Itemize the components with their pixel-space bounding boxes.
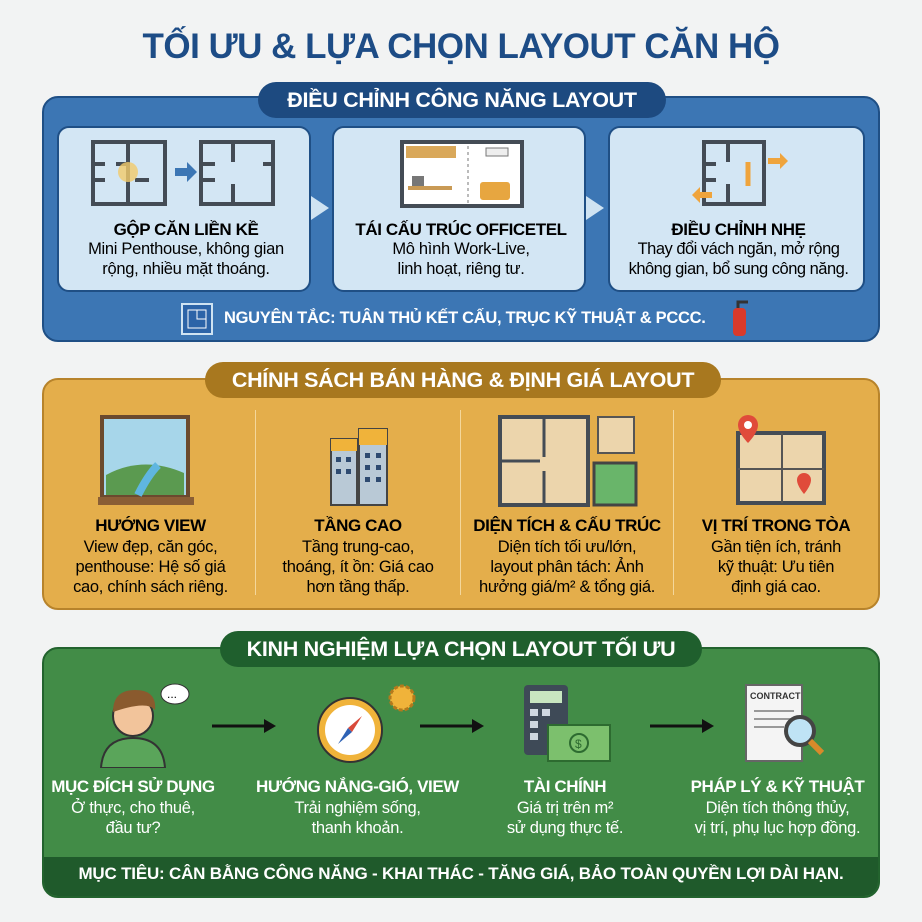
item: diện tích [473,415,661,596]
card: officetel: TÁI CẤU TRÚC OFFICETEL [355,220,567,239]
panel: green experience [42,647,880,898]
text: GỘP CĂN LIỀN KỀ [114,220,258,239]
icon: map pins [736,415,826,505]
item: diện tích: Diện tích tối ưu/lớn, [498,538,636,556]
heading: blue [258,82,666,118]
item: tầng cao: hơn tầng thấp. [307,578,409,596]
item: vị trí: kỹ thuật: Ưu tiên [718,558,834,576]
step 1 [51,684,215,837]
step 3: sử dụng thực tế. [507,819,623,837]
card: điều chỉnh nhẹ: không gian, bổ sung công năng. [629,260,848,278]
icon: contract: CONTRACT [750,691,801,701]
card: officetel [332,126,586,292]
heading: green: KINH NGHIỆM LỰA CHỌN LAYOUT TỐI ƯU [247,637,675,661]
arrow [650,719,714,733]
card: gộp căn: rộng, nhiều mặt thoáng. [102,260,270,278]
step 2: thanh khoản. [312,819,403,837]
item: hướng view [73,415,228,596]
icon: calculator and money: $ [575,737,582,751]
step 3: Giá trị trên m² [517,799,613,817]
item: tầng cao: thoáng, ít ồn: Giá cao [282,558,434,576]
step 2: Trải nghiệm sống, [294,799,421,817]
icon: floor plans [498,415,638,507]
card: gộp căn: Mini Penthouse, không gian [88,240,284,258]
icon: office [400,140,524,208]
item: diện tích: layout phân tách: Ảnh [490,558,644,576]
item: vị trí: Gần tiện ích, tránh [711,538,841,556]
item: vị trí [702,415,850,596]
step 4: Diện tích thông thủy, [706,799,849,817]
panel: blue adjustment [42,96,880,342]
step 4: PHÁP LÝ & KỸ THUẬT [691,777,864,796]
icon: calculator and money [524,685,611,762]
step 2: HƯỚNG NẮNG-GIÓ, VIEW [256,777,459,796]
icon: extinguisher [733,300,748,336]
item: hướng view: HƯỚNG VIEW [95,516,206,535]
title: TỐI ƯU & LỰA CHỌN LAYOUT CĂN HỘ [143,27,779,66]
card: điều chỉnh nhẹ: Thay đổi vách ngăn, mở rộng [638,240,839,258]
arrow [311,196,329,220]
item: hướng view: cao, chính sách riêng. [73,578,228,596]
heading: gold [205,362,721,398]
arrow [212,719,276,733]
item: hướng view: View đẹp, căn góc, [84,538,217,556]
heading: blue: ĐIỀU CHỈNH CÔNG NĂNG LAYOUT [287,88,637,112]
item: tầng cao: Tầng trung-cao, [302,538,414,556]
icon: building [330,428,388,506]
icon: thinking person: ... [167,687,177,701]
dividers [255,410,256,595]
icon: contract [745,684,824,762]
step 4 [691,684,865,837]
item: diện tích: DIỆN TÍCH & CẤU TRÚC [473,516,661,535]
icon: thinking person [100,684,190,768]
icon: window [98,415,194,505]
icon: merge plans [91,140,275,206]
step 1: Ở thực, cho thuê, [71,799,195,817]
step 1: MỤC ĐÍCH SỬ DỤNG [51,777,215,796]
footer note: blue: NGUYÊN TẮC: TUÂN THỦ KẾT CẤU, TRỤC KỸ THUẬT & PCCC. [224,309,706,327]
card: điều chỉnh nhẹ: ĐIỀU CHỈNH NHẸ [671,220,806,239]
card: officetel: Mô hình Work-Live, [392,240,530,258]
step 4: vị trí, phụ lục hợp đồng. [695,819,860,837]
item: tầng cao [282,428,434,596]
icon: blueprint [181,303,213,335]
card: điều chỉnh nhẹ [608,126,865,292]
heading: gold: CHÍNH SÁCH BÁN HÀNG & ĐỊNH GIÁ LAYOUT [232,368,694,392]
step 2 [256,684,460,837]
item: vị trí: VỊ TRÍ TRONG TÒA [702,516,850,535]
icon: compass and sun [317,684,416,763]
step 1: đầu tư? [106,819,160,837]
item: diện tích: hưởng giá/m² & tổng giá. [479,578,655,596]
footer band [44,857,882,900]
card: gộp căn [57,126,311,292]
item: tầng cao: TẦNG CAO [314,516,402,535]
step 3 [507,685,623,837]
item: hướng view: penthouse: Hệ số giá [76,558,225,576]
item: vị trí: định giá cao. [731,578,821,596]
heading: green [220,631,702,667]
card: officetel: linh hoạt, riêng tư. [397,260,525,278]
panel: gold pricing [42,378,880,610]
icon: adjust plan [692,140,788,206]
arrow [586,196,604,220]
arrow [420,719,484,733]
footer note: blue [181,300,748,336]
step 3: TÀI CHÍNH [524,777,606,796]
footer note: green: MỤC TIÊU: CÂN BẰNG CÔNG NĂNG - KHAI THÁC - TĂNG GIÁ, BẢO TOÀN QUYỀN LỢI DÀI HẠN. [78,864,844,883]
